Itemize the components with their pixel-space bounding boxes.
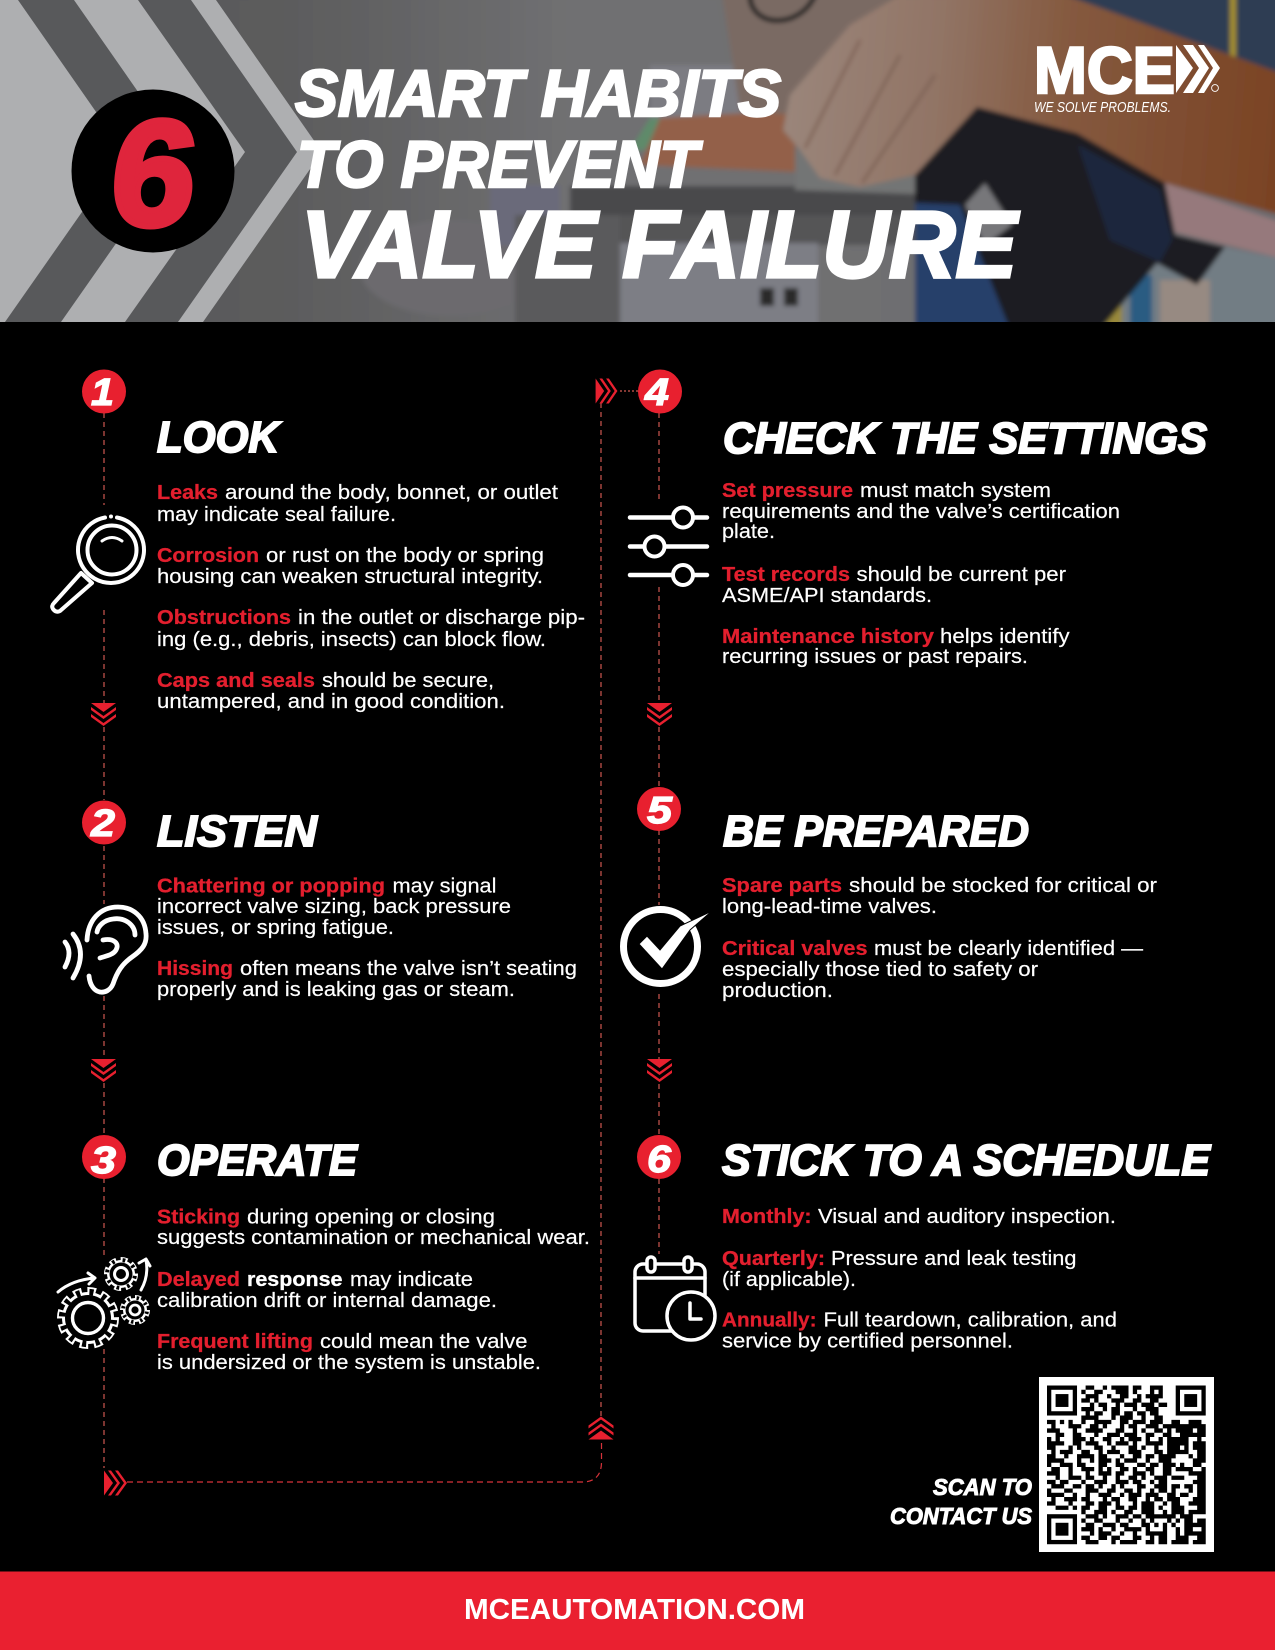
text: set pressure: plate. — [722, 520, 775, 543]
number badge 3: 3 — [91, 1140, 116, 1182]
text: leaks: around the body, bonnet, or outlet — [225, 481, 558, 504]
text: hissing: properly and is leaking gas or steam. — [157, 978, 515, 1001]
chevron pattern — [0, 0, 322, 322]
panel: step 1 look — [52, 370, 585, 713]
panel: step 5 be prepared — [624, 787, 1157, 1002]
text: hissing: Hissing — [157, 957, 233, 980]
arrow: step 2 to 3 — [91, 1059, 116, 1082]
text: frequent lifting: Frequent lifting — [157, 1330, 313, 1353]
arrow: bottom turn — [104, 1470, 127, 1496]
MCE logo: MCE — [1034, 33, 1175, 107]
text: set pressure: must match system — [860, 479, 1051, 502]
number badge 2: 2 — [90, 803, 115, 845]
text: quarterly: Quarterly: — [722, 1247, 825, 1270]
MCE logo: WE SOLVE PROBLEMS. — [1034, 99, 1171, 116]
icon: gears — [58, 1259, 150, 1344]
number badge 5 — [637, 787, 681, 832]
text: spare parts: long-lead-time valves. — [722, 895, 937, 918]
text: hissing — [157, 957, 577, 1001]
text: test records — [722, 563, 1066, 607]
text: obstructions: Obstructions — [157, 606, 291, 629]
MCE logo — [1035, 45, 1220, 112]
text: delayed response: may indicate — [350, 1268, 473, 1291]
text: monthly: Visual and auditory inspection. — [818, 1205, 1116, 1228]
text: maintenance history: recurring issues or past repairs. — [722, 645, 1028, 668]
number badge 5: 5 — [647, 790, 673, 832]
text: critical valves: especially those tied to safety or — [722, 958, 1038, 981]
text: frequent lifting: could mean the valve — [320, 1330, 528, 1353]
text: delayed response — [157, 1268, 497, 1312]
text: leaks: Leaks — [157, 481, 218, 504]
text: frequent lifting: is undersized or the system is unstable. — [157, 1351, 541, 1374]
text: chattering: incorrect valve sizing, back pressure — [157, 895, 511, 918]
text: obstructions: ing (e.g., debris, insects) can block flow. — [157, 628, 546, 651]
text: spare parts — [722, 874, 1157, 918]
text: leaks: may indicate seal failure. — [157, 503, 396, 526]
text: annually: service by certified personnel. — [722, 1330, 1013, 1352]
title: SMART HABITS — [295, 56, 781, 130]
text: test records: Test records — [722, 563, 850, 586]
text: test records: ASME/API standards. — [722, 584, 932, 607]
panel: step 3 operate — [58, 1135, 590, 1374]
text: caps and seals: should be secure, — [322, 669, 494, 692]
text: test records: should be current per — [856, 563, 1066, 586]
text: annually: Annually: — [722, 1308, 816, 1332]
text: corrosion — [157, 544, 544, 588]
text: frequent lifting — [157, 1330, 541, 1374]
scan to contact us label — [890, 1474, 1033, 1529]
text: quarterly: Pressure and leak testing — [831, 1247, 1076, 1270]
text: critical valves — [722, 937, 1144, 1002]
text: sticking — [157, 1206, 590, 1249]
scan to contact us label: CONTACT US — [890, 1503, 1033, 1529]
text: chattering: issues, or spring fatigue. — [157, 916, 394, 939]
text: maintenance history — [722, 625, 1070, 668]
process connector line — [104, 391, 659, 1482]
text: spare parts: Spare parts — [722, 874, 842, 897]
QR code — [1039, 1377, 1214, 1552]
text: chattering: Chattering or popping — [157, 874, 385, 898]
arrow: step 5 to 6 — [647, 1059, 672, 1082]
text: delayed response: response — [247, 1268, 342, 1291]
number badge 4 — [638, 370, 682, 414]
text: set pressure — [722, 479, 1120, 543]
scan to contact us label: SCAN TO — [933, 1474, 1032, 1500]
text: maintenance history: helps identify — [940, 625, 1070, 648]
text: leaks — [157, 481, 558, 526]
panel: step 4 check the settings — [630, 370, 1207, 668]
text: obstructions — [157, 606, 585, 651]
icon: ear with sound waves — [65, 907, 146, 992]
text: sticking: during opening or closing — [247, 1206, 495, 1228]
header photo: technician hand on valve — [203, 0, 1275, 322]
text: set pressure: Set pressure — [722, 479, 853, 502]
number badge 6: 6 — [647, 1139, 672, 1181]
footer bar — [0, 1572, 1275, 1650]
title — [294, 68, 1022, 280]
text: caps and seals: Caps and seals — [157, 669, 315, 692]
arrow: step 1 to 2 — [91, 703, 116, 726]
text: caps and seals — [157, 669, 505, 713]
heading: be prepared: BE PREPARED — [723, 807, 1029, 856]
arrow: upward return — [588, 1416, 614, 1440]
text: spare parts: should be stocked for critical or — [849, 874, 1157, 897]
text: chattering: may signal — [392, 874, 496, 898]
text: quarterly — [722, 1247, 1076, 1291]
icon: sliders — [630, 508, 707, 585]
text: annually — [722, 1308, 1117, 1352]
number badge 1 — [82, 370, 126, 414]
number badge 1: 1 — [91, 372, 114, 414]
text: corrosion: Corrosion — [157, 544, 259, 567]
text: corrosion: or rust on the body or spring — [266, 544, 544, 567]
text: critical valves: must be clearly identified — — [874, 937, 1144, 960]
panel: step 2 listen — [65, 800, 577, 1001]
text: maintenance history: Maintenance history — [722, 625, 935, 648]
heading: listen: LISTEN — [157, 807, 318, 856]
big number six badge — [72, 89, 234, 257]
header banner — [0, 0, 1275, 335]
number badge 6 — [637, 1135, 681, 1181]
text: delayed response: calibration drift or internal damage. — [157, 1289, 497, 1312]
text: quarterly: (if applicable). — [722, 1268, 856, 1291]
icon: magnifying glass — [52, 515, 144, 612]
icon: check mark in circle — [624, 910, 712, 984]
text: caps and seals: untampered, and in good condition. — [157, 690, 505, 713]
text: delayed response: Delayed — [157, 1268, 240, 1291]
heading: stick to a schedule: STICK TO A SCHEDULE — [722, 1136, 1212, 1185]
text: critical valves: production. — [722, 979, 833, 1002]
heading: operate: OPERATE — [157, 1136, 359, 1185]
text: chattering — [157, 874, 511, 939]
arrow: step 4 to 5 — [647, 703, 672, 726]
arrow: into step 4 — [596, 378, 617, 404]
text: annually: Full teardown, calibration, and — [824, 1308, 1117, 1332]
heading: look: LOOK — [157, 413, 282, 462]
text: obstructions: in the outlet or discharge pip- — [298, 606, 585, 629]
title: TO PREVENT — [297, 127, 702, 201]
number badge 3 — [82, 1135, 126, 1182]
number badge 4: 4 — [644, 372, 669, 414]
text: monthly: Monthly: — [722, 1205, 812, 1228]
heading: check the settings: CHECK THE SETTINGS — [723, 414, 1207, 463]
title: VALVE FAILURE — [301, 192, 1020, 298]
text: set pressure: requirements and the valve’s certification — [722, 500, 1120, 523]
icon: calendar with clock — [635, 1257, 715, 1340]
footer website: MCEAUTOMATION.COM — [464, 1594, 805, 1626]
number badge 2 — [82, 800, 126, 845]
text: corrosion: housing can weaken structural integrity. — [157, 565, 543, 588]
text: hissing: often means the valve isn’t seating — [240, 957, 577, 980]
text: sticking: Sticking — [157, 1206, 240, 1228]
text: critical valves: Critical valves — [722, 937, 868, 960]
panel: step 6 stick to a schedule — [635, 1135, 1212, 1352]
text: sticking: suggests contamination or mechanical wear. — [157, 1226, 590, 1249]
big number six badge: 6 — [104, 89, 205, 257]
